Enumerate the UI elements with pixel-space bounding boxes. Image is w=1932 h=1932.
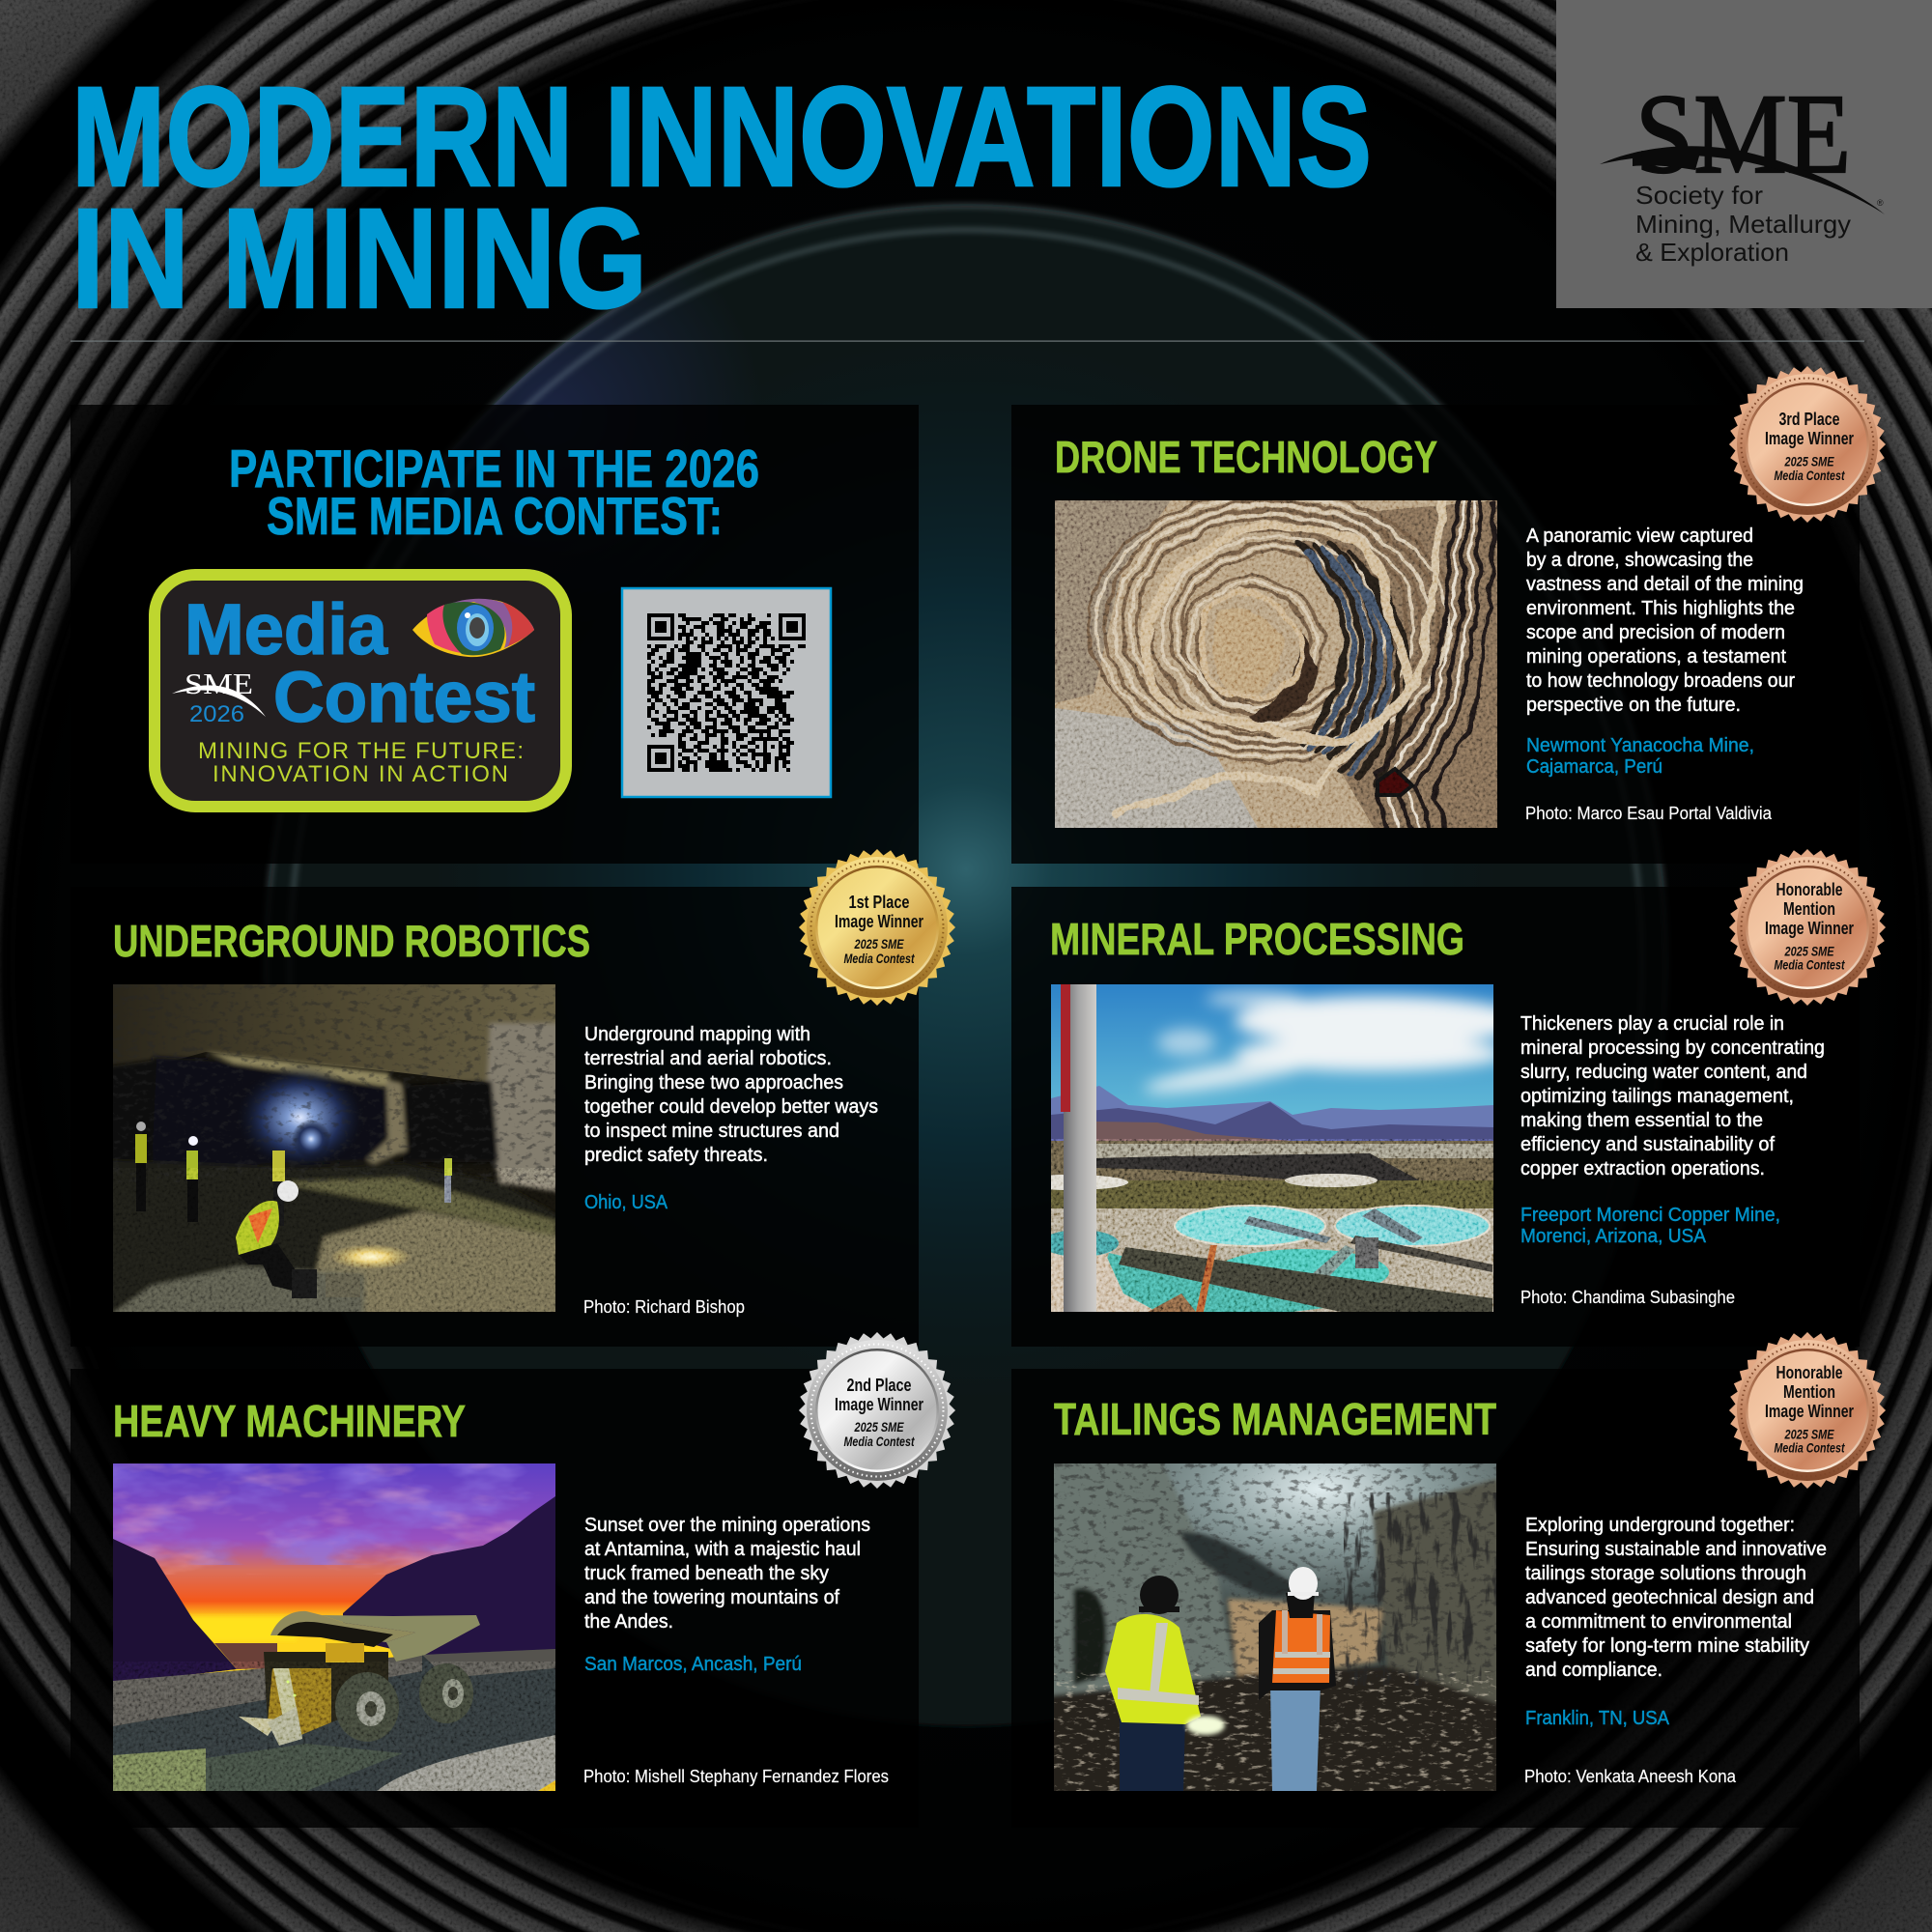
truck <box>239 1611 480 1746</box>
caption: mineral: Photo: Chandima Subasinghe <box>1520 1288 1735 1307</box>
caption: robotics: Photo: Richard Bishop <box>583 1297 745 1317</box>
caption: drone: scope and precision of modern <box>1526 622 1785 643</box>
caption: robotics: Ohio, USA <box>584 1192 668 1213</box>
media contest logo: Contest <box>273 657 535 737</box>
SME logo panel: ® <box>1877 198 1884 208</box>
heading: participate <box>229 439 759 546</box>
badge: honorable mention mineral <box>1727 847 1888 1008</box>
caption: tailings: Photo: Venkata Aneesh Kona <box>1524 1767 1737 1786</box>
title: MODERN INNOVATIONS <box>71 58 1372 216</box>
caption: drone: Newmont Yanacocha Mine, <box>1526 735 1754 756</box>
caption: drone: perspective on the future. <box>1526 695 1741 716</box>
caption: tailings: tailings storage solutions through <box>1525 1563 1806 1584</box>
caption: tailings: Exploring underground together: <box>1525 1515 1795 1536</box>
caption: mineral: efficiency and sustainability of <box>1520 1134 1775 1155</box>
panel: heavy machinery <box>71 1369 919 1828</box>
heading: MINERAL PROCESSING <box>1050 914 1464 964</box>
heading: participate: SME MEDIA CONTEST: <box>267 486 723 546</box>
heading: TAILINGS MANAGEMENT <box>1054 1394 1496 1444</box>
caption: robotics <box>583 1024 878 1317</box>
badge: 2nd place <box>797 1330 957 1491</box>
caption: mineral: mineral processing by concentrating <box>1520 1037 1825 1059</box>
caption: heavy: Photo: Mishell Stephany Fernandez Flores <box>583 1767 889 1786</box>
badge: 2nd place: Image Winner <box>835 1395 923 1414</box>
media contest logo: Media <box>185 589 388 669</box>
title: IN MINING <box>71 180 647 338</box>
caption: robotics: Underground mapping with <box>584 1024 810 1045</box>
caption: mineral: optimizing tailings management, <box>1520 1086 1794 1107</box>
media contest logo <box>155 575 566 807</box>
panel: drone technology <box>1011 405 1860 864</box>
caption: robotics: together could develop better ways <box>584 1096 878 1118</box>
photo: thickeners under blue sky <box>1051 984 1493 1312</box>
badge: honorable mention mineral: Honorable <box>1776 880 1843 899</box>
caption: tailings: and compliance. <box>1525 1660 1662 1681</box>
badge: 3rd place: Image Winner <box>1765 429 1854 448</box>
panel: participate in contest <box>71 405 919 864</box>
badge: honorable mention mineral: 2025 SME <box>1784 945 1834 959</box>
caption: mineral: Thickeners play a crucial role in <box>1520 1013 1784 1035</box>
photo: haul truck at sunset <box>113 1463 555 1791</box>
icon: eye <box>412 599 534 657</box>
caption: tailings: Ensuring sustainable and innovative <box>1525 1539 1827 1560</box>
badge: honorable mention mineral: Media Contest <box>1774 958 1845 972</box>
heading: DRONE TECHNOLOGY <box>1055 432 1437 482</box>
badge: 1st place: 2025 SME <box>854 937 904 952</box>
caption: drone: mining operations, a testament <box>1526 646 1786 668</box>
panel: mineral processing <box>1011 887 1860 1347</box>
SME logo panel: Society for <box>1635 181 1763 210</box>
badge: honorable mention tailings: Image Winner <box>1765 1402 1854 1421</box>
panel: tailings management <box>1011 1369 1860 1828</box>
SME logo panel: SME <box>1635 71 1851 197</box>
panel: underground robotics <box>71 887 919 1347</box>
SME logo panel <box>1556 0 1932 308</box>
media contest logo: MINING FOR THE FUTURE: <box>198 738 524 764</box>
caption: heavy <box>583 1515 889 1786</box>
badge: 1st place <box>797 847 957 1008</box>
badge: 1st place: Media Contest <box>844 952 915 966</box>
caption: drone: vastness and detail of the mining <box>1526 574 1804 595</box>
caption: mineral: making them essential to the <box>1520 1110 1763 1131</box>
caption: drone: A panoramic view captured <box>1526 526 1753 547</box>
worker in orange vest <box>1259 1567 1336 1791</box>
SME logo panel: & Exploration <box>1635 238 1789 267</box>
SME logo panel: Mining, Metallurgy <box>1635 210 1851 239</box>
caption: drone: Photo: Marco Esau Portal Valdivia <box>1525 804 1773 823</box>
heading: UNDERGROUND ROBOTICS <box>113 916 590 966</box>
caption: drone <box>1525 526 1804 823</box>
caption: heavy: and the towering mountains of <box>584 1587 839 1608</box>
caption: heavy: at Antamina, with a majestic haul <box>584 1539 861 1560</box>
badge: 3rd place: 2025 SME <box>1784 454 1834 469</box>
caption: tailings: advanced geotechnical design and <box>1525 1587 1814 1608</box>
caption: heavy: truck framed beneath the sky <box>584 1563 829 1584</box>
heading: participate: PARTICIPATE IN THE 2026 <box>229 439 759 498</box>
badge: 3rd place: 3rd Place <box>1779 410 1839 429</box>
caption: tailings: safety for long-term mine stability <box>1525 1635 1809 1657</box>
caption: robotics: terrestrial and aerial robotics. <box>584 1048 832 1069</box>
caption: mineral: Freeport Morenci Copper Mine, <box>1520 1205 1780 1226</box>
badge: honorable mention tailings <box>1727 1330 1888 1491</box>
caption: drone: Cajamarca, Perú <box>1526 756 1662 778</box>
media contest logo: INNOVATION IN ACTION <box>213 761 508 787</box>
caption: heavy: San Marcos, Ancash, Perú <box>584 1654 802 1675</box>
caption: tailings: Franklin, TN, USA <box>1525 1708 1670 1729</box>
caption: robotics: to inspect mine structures and <box>584 1121 839 1142</box>
badge: 1st place: 1st Place <box>848 893 910 912</box>
caption: drone: environment. This highlights the <box>1526 598 1795 619</box>
badge: 3rd place <box>1727 364 1888 525</box>
caption: heavy: Sunset over the mining operations <box>584 1515 870 1536</box>
worker in yellow jacket <box>1105 1576 1201 1791</box>
media contest logo: SME <box>185 667 253 700</box>
badge: 2nd place: Media Contest <box>844 1435 915 1449</box>
badge: honorable mention mineral: Mention <box>1783 899 1835 919</box>
media contest logo: 2026 <box>189 701 244 727</box>
badge: 2nd place: 2025 SME <box>854 1420 904 1435</box>
photo: open pit mine from drone <box>1055 500 1497 828</box>
caption: drone: to how technology broadens our <box>1526 670 1795 692</box>
badge: 3rd place: Media Contest <box>1774 469 1845 483</box>
badge: honorable mention tailings: Media Contest <box>1774 1441 1845 1455</box>
caption: robotics: predict safety threats. <box>584 1145 768 1166</box>
caption: drone: by a drone, showcasing the <box>1526 550 1753 571</box>
caption: heavy: the Andes. <box>584 1611 673 1633</box>
photo: two workers in tunnel <box>1054 1463 1496 1791</box>
QR code <box>622 588 831 797</box>
heading: HEAVY MACHINERY <box>113 1396 466 1446</box>
badge: honorable mention tailings: 2025 SME <box>1784 1428 1834 1442</box>
caption: tailings: a commitment to environmental <box>1525 1611 1792 1633</box>
caption: mineral: Morenci, Arizona, USA <box>1520 1226 1707 1247</box>
caption: mineral <box>1520 1013 1825 1307</box>
workers <box>135 1122 452 1226</box>
caption: mineral: slurry, reducing water content, and <box>1520 1062 1807 1083</box>
caption: robotics: Bringing these two approaches <box>584 1072 843 1094</box>
badge: 1st place: Image Winner <box>835 912 923 931</box>
badge: honorable mention tailings: Mention <box>1783 1382 1835 1402</box>
badge: honorable mention tailings: Honorable <box>1776 1363 1843 1382</box>
caption: tailings <box>1524 1515 1827 1786</box>
badge: honorable mention mineral: Image Winner <box>1765 919 1854 938</box>
photo: robotics in underground mine <box>113 984 555 1312</box>
badge: 2nd place: 2nd Place <box>846 1376 912 1395</box>
caption: mineral: copper extraction operations. <box>1520 1158 1765 1179</box>
title <box>71 58 1372 338</box>
